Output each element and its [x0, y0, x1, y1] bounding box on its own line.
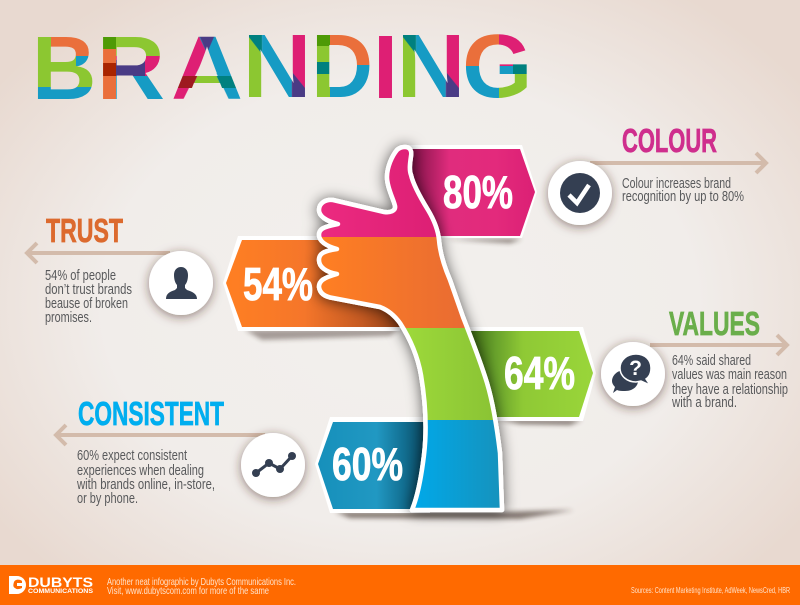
percentage: 60%: 60%	[332, 438, 403, 490]
arrow: consistent	[56, 425, 265, 445]
footer logo	[9, 574, 93, 595]
heading: trust: TRUST	[46, 212, 123, 249]
ground shadows	[245, 239, 582, 519]
footer logo: COMMUNICATIONS	[28, 589, 93, 595]
title: BRANDING: G	[462, 17, 532, 117]
icon: speech bubbles circle: ?	[629, 357, 642, 380]
icon: check mark circle	[548, 161, 612, 225]
percentage: 64%: 64%	[504, 347, 575, 399]
arrow: trust	[27, 243, 170, 263]
heading: colour: COLOUR	[622, 122, 717, 159]
ribbon: 80% pink	[400, 145, 537, 238]
title: BRANDING: B	[32, 18, 96, 118]
ribbon: 54% orange	[223, 236, 400, 331]
text: trust: don’t trust brands	[45, 282, 132, 298]
title: BRANDING: D	[311, 16, 373, 116]
title: BRANDING	[32, 15, 532, 119]
footer credit text: Another neat infographic by Dubyts Communications Inc.	[107, 576, 296, 588]
icon: person circle	[149, 251, 213, 315]
text: consistent	[76, 448, 215, 507]
text: colour	[622, 176, 744, 205]
text: trust: promises.	[45, 310, 92, 326]
icon: line chart circle	[241, 433, 305, 497]
title: BRANDING: R	[97, 17, 165, 119]
text: colour: Colour increases brand	[622, 176, 731, 192]
text: trust	[45, 268, 132, 326]
text: consistent: experiences when dealing	[77, 463, 204, 479]
text: trust: 54% of people	[45, 268, 116, 284]
percentage: 54%: 54%	[243, 258, 313, 310]
text: trust: beause of broken	[45, 296, 128, 312]
footer credit text	[107, 576, 296, 597]
footer logo: DUBYTS	[28, 574, 93, 590]
icon: speech bubbles circle	[601, 342, 665, 406]
title: BRANDING: A	[171, 18, 243, 119]
arrow: values	[650, 335, 787, 355]
title: BRANDING: N	[243, 15, 311, 116]
title: BRANDING: I	[373, 18, 398, 118]
footer credit text: Visit, www.dubytscom.com for more of the same	[107, 585, 269, 597]
arrow: colour	[590, 153, 766, 173]
heading: values: VALUES	[669, 305, 760, 342]
percentage: 80%: 80%	[443, 166, 513, 218]
text: values	[671, 353, 788, 411]
ribbon: 60% blue	[315, 417, 430, 513]
text: consistent: or by phone.	[77, 491, 138, 507]
text: colour: recognition by up to 80%	[622, 189, 744, 205]
thumbs-up hand	[310, 140, 510, 515]
heading: consistent: CONSISTENT	[78, 395, 224, 432]
text: consistent: 60% expect consistent	[77, 448, 187, 464]
footer bar	[0, 565, 800, 605]
ribbon: 64% green	[465, 327, 596, 421]
text: values: 64% said shared	[672, 353, 751, 369]
text: consistent: with brands online, in-store,	[76, 477, 215, 493]
text: values: with a brand.	[671, 395, 737, 411]
title: BRANDING: N	[397, 15, 465, 116]
